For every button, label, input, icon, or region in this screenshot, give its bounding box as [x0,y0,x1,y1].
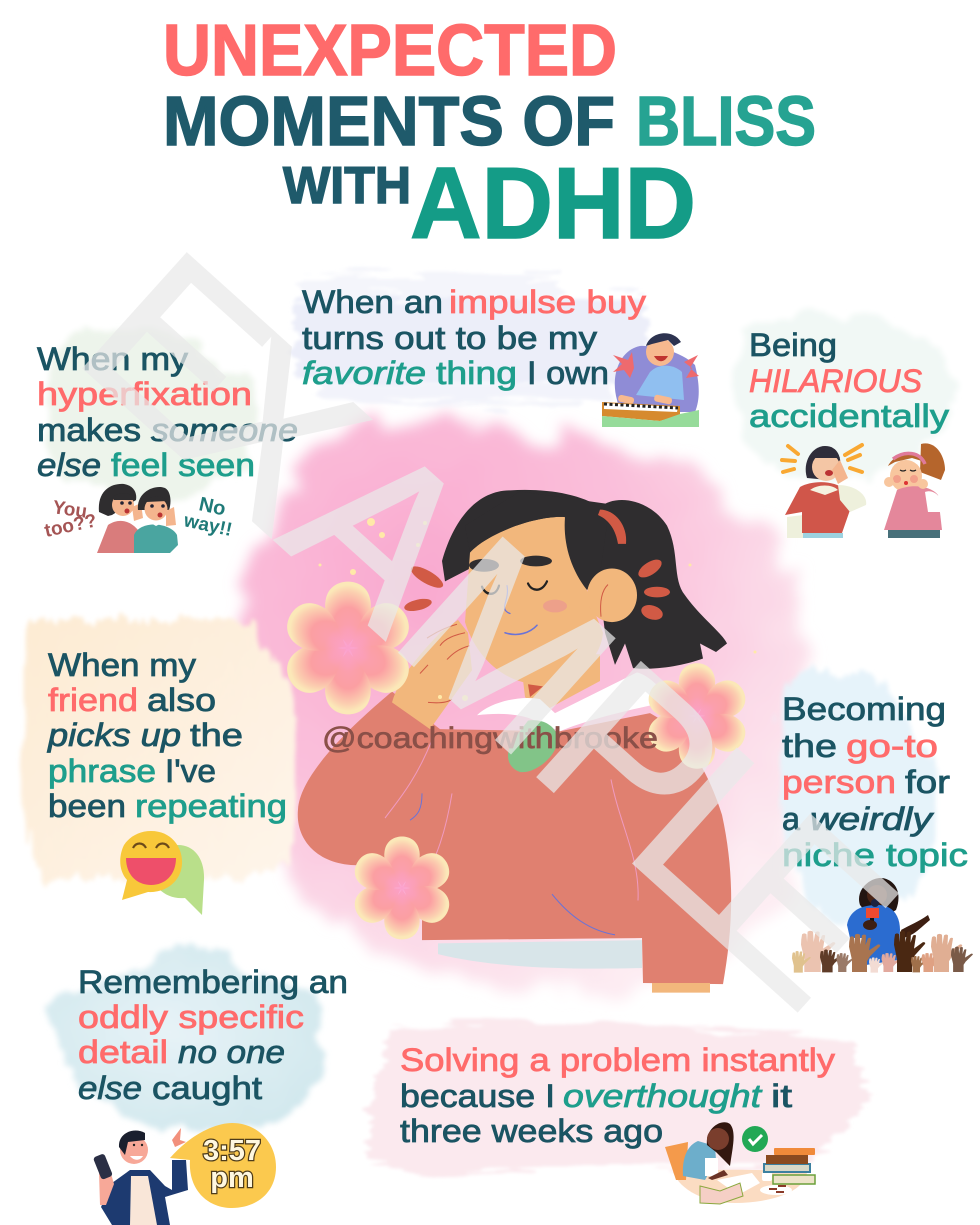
text: go-to person: the [782,728,837,764]
watercolor backdrop: pink [237,418,811,995]
undershirt hem [438,940,642,969]
time label [203,1135,261,1194]
green tie [508,720,558,772]
collar [477,672,668,731]
title: WITH [283,157,411,215]
icon: laughing girls [782,443,945,538]
watercolor backdrop: teal [48,949,323,1132]
text: overthought: it [771,1078,792,1114]
face [465,517,603,684]
fringe [465,491,610,590]
text: hyperfixation: feel seen [111,447,255,483]
flower: bottom [349,837,455,939]
brush backdrop: blue [780,668,935,925]
time label: pm [210,1162,254,1194]
text: oddly specific detail: detail [78,1034,168,1070]
text: hyperfixation: else [37,447,101,483]
text: oddly specific detail: no one [178,1034,285,1070]
text: impulse buy: When an [302,284,443,320]
text: impulse buy: impulse buy [449,284,646,320]
text: impulse buy: favorite [302,355,426,391]
ankle skin [652,983,710,993]
text: go-to person [782,691,968,873]
flower: left [279,582,417,714]
watercolor backdrop: pink lower [370,1020,870,1175]
text: oddly specific detail: Remembering an [78,964,348,1000]
text: go-to person: weirdly [810,801,934,837]
text: overthought: Solving a problem instantly [400,1042,835,1078]
text: hyperfixation [37,341,298,483]
icon: boy playing piano [602,333,699,427]
text: friend phrase: picks up [47,717,181,753]
hair clips [636,556,670,622]
text: hyperfixation: When my [37,341,188,377]
title: UNEXPECTED [163,11,617,91]
text: friend phrase: the [190,717,243,753]
text: hilarious [749,327,949,434]
icon: speaker with crowd [792,878,973,973]
text: hyperfixation: someone [151,412,298,448]
text: go-to person: niche topic [782,837,968,873]
text: impulse buy: I own [527,355,609,391]
text: friend phrase: friend [48,682,138,718]
surprise marks [403,562,446,613]
text: oddly specific detail: caught [152,1070,262,1106]
text: hilarious: accidentally [749,398,949,434]
text: oddly specific detail: oddly specific [78,999,304,1035]
hand lettering: no way: way!! [181,510,234,541]
sweater creases [385,740,638,935]
text: hilarious: Being [749,327,837,363]
hand lettering: you too: You [51,497,88,523]
hand on chin [392,620,472,729]
text: overthought: overthought [563,1078,762,1114]
text: hilarious: HILARIOUS [749,363,922,399]
text: friend phrase: also [147,682,216,718]
ear [587,569,637,622]
watercolor backdrop: green [45,327,254,501]
hand lettering: you too: too?? [43,510,99,542]
face features [469,556,567,634]
hand lettering: no way: No [197,493,228,520]
text: oddly specific detail: else [78,1070,142,1106]
text: friend phrase: phrase [48,753,156,789]
hair tie [598,510,626,544]
text: impulse buy: turns out to be my [302,320,597,356]
icon: two girls whispering [97,484,178,553]
text: hyperfixation: hyperfixation [37,376,252,412]
title: ADHD [410,148,696,260]
title: BLISS [636,82,816,160]
text: hyperfixation: makes [37,412,141,448]
hand lettering: no way [181,493,234,541]
brush backdrop: peach [22,620,295,880]
sweater body [298,692,731,984]
neck [520,654,600,713]
text: friend phrase: I've [165,753,216,789]
time label: 3:57 [203,1135,261,1167]
text: go-to person: a [782,801,800,837]
text: go-to person: go-to [846,728,938,764]
handle text: @coachingwithbrooke [322,722,658,755]
text: impulse buy [302,284,646,391]
icon: man with phone and time bubble [93,1123,276,1225]
brush backdrop: lavender [296,275,646,407]
main character illustration [298,490,731,993]
title: MOMENTS OF [163,82,615,160]
text: overthought [400,1042,835,1149]
flower: right [642,663,752,769]
sparkle dots [298,518,756,701]
hair back and ponytail [442,490,727,669]
text: friend phrase: repeating [135,788,287,824]
text: overthought: three weeks ago [400,1113,663,1149]
watermark: EXAMPLE: EXAMPLE [39,207,939,1053]
icon: emoji chat bubbles [120,831,204,915]
icon: woman studying with books [665,1122,815,1204]
text: go-to person: person [782,764,896,800]
title [163,11,816,260]
watercolor backdrop: mint [735,312,953,478]
text: friend phrase: been [48,788,126,824]
text: go-to person: for [905,764,950,800]
text: oddly specific detail [78,964,348,1106]
text: friend phrase [47,647,287,824]
text: overthought: because I [400,1078,555,1114]
text: impulse buy: thing [436,355,517,391]
text: go-to person: Becoming [782,691,946,727]
text: friend phrase: When my [48,647,196,683]
